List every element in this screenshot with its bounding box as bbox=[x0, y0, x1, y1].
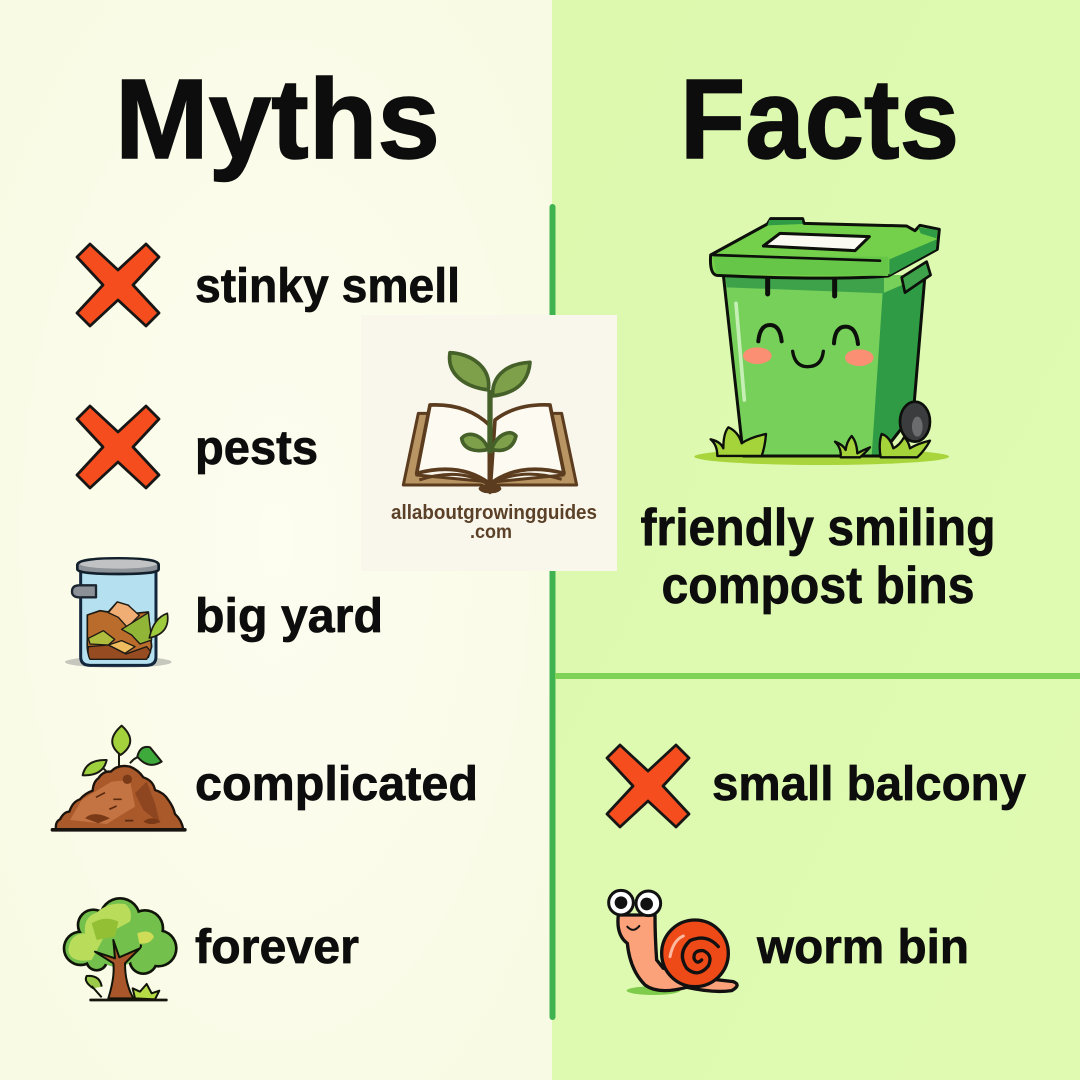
vertical divider bbox=[550, 204, 556, 1020]
panel: myths background bbox=[0, 0, 552, 1080]
logo text bbox=[391, 502, 597, 543]
horizontal divider bbox=[555, 673, 1080, 679]
text: friendly smiling compost bins bbox=[640, 499, 996, 615]
icon: compost pile with sprout bbox=[51, 726, 187, 832]
label: forever: forever bbox=[195, 921, 359, 974]
icon: open book with seedling bbox=[403, 353, 577, 493]
label: small balcony: small balcony bbox=[712, 758, 1026, 811]
label: pests: pests bbox=[195, 422, 318, 475]
icon: red cross, stinky smell bbox=[77, 244, 159, 326]
icon: jar of compost bbox=[65, 558, 172, 668]
label: complicated: complicated bbox=[195, 758, 478, 811]
label: worm bin: worm bin bbox=[756, 921, 969, 974]
heading: Myths: Myths bbox=[115, 56, 440, 182]
label: stinky smell: stinky smell bbox=[195, 260, 460, 313]
heading: Facts: Facts bbox=[680, 56, 959, 182]
text: friendly smiling compost bins: compost bins bbox=[662, 557, 974, 615]
icon: smiling green compost bin bbox=[694, 219, 949, 465]
logo text: allaboutgrowingguides bbox=[391, 502, 597, 524]
text: friendly smiling compost bins: friendly smiling bbox=[640, 499, 996, 557]
panel: facts background bbox=[552, 0, 1080, 1080]
icon: tree bbox=[63, 897, 178, 1001]
logo panel: allaboutgrowingguides.com bbox=[361, 315, 617, 571]
icon: red cross, small balcony bbox=[607, 745, 689, 827]
icon: red cross, pests bbox=[77, 406, 159, 488]
logo text: .com bbox=[470, 522, 512, 543]
label: big yard: big yard bbox=[195, 590, 383, 643]
icon: snail bbox=[609, 890, 737, 995]
